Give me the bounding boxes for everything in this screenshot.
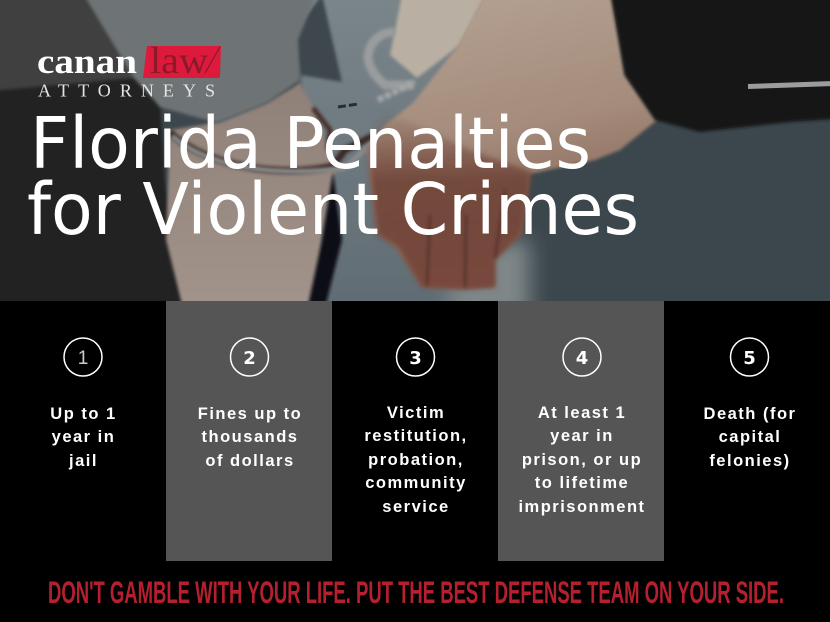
column 5: death: Death (for [704,405,796,423]
column 2: fines: Fines up to [198,405,302,423]
column 1: jail: jail [68,452,98,470]
column 1: jail [50,338,117,470]
panel: penalty columns background [0,301,830,622]
title [27,102,639,251]
column 1: jail: year in [52,428,115,446]
logo: canan law attorneys: ATTORNEYS [38,80,215,100]
column 2: fines: thousands [202,428,298,446]
column 4: prison: At least 1 [538,404,626,422]
column 3: restitution: restitution, [364,427,468,445]
column 4: prison: imprisonment [518,498,646,516]
column 5: death [704,338,796,470]
column 4: prison: 4 [576,348,588,369]
column 1: jail: 1 [78,348,88,369]
logo: canan law attorneys [37,40,221,100]
column 2: fines: 2 [243,348,256,369]
column 1: jail: Up to 1 [50,405,117,423]
logo: canan law attorneys: law [150,40,209,82]
column 3: restitution: community [365,474,467,492]
column 3: restitution: Victim [387,404,445,422]
background photo: handcuffed hands [0,0,830,320]
column 5: death: 5 [743,348,756,369]
title: Florida Penalties [30,102,591,185]
column 3: restitution: probation, [368,451,464,469]
column 3: restitution: 3 [409,348,422,369]
column 4: prison: to lifetime [535,474,629,492]
column 3: restitution: service [382,498,450,516]
column 4: prison: year in [550,427,614,445]
column 5: death: capital [719,428,781,446]
column 4: prison [518,338,646,516]
column 5: death: felonies) [709,452,791,470]
column 2: fines: of dollars [205,452,295,470]
column 2: fines [198,338,302,470]
column 4: prison: prison, or up [522,451,642,469]
column 3: restitution [364,338,468,516]
logo: canan law attorneys: canan [37,42,137,81]
title: for Violent Crimes [27,168,639,251]
